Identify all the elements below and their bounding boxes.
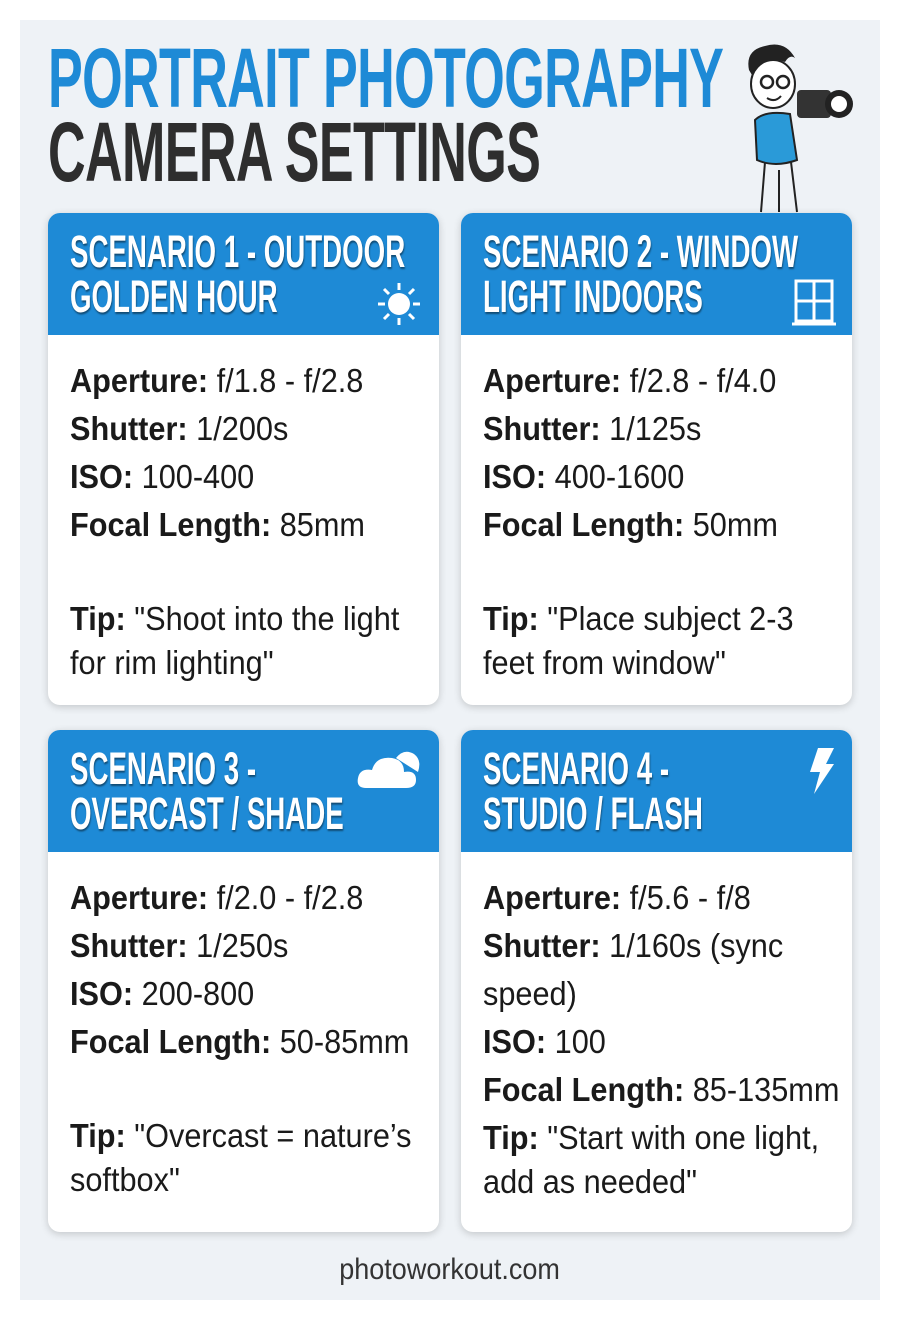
settings text: speed) (483, 975, 577, 1012)
title (48, 31, 723, 199)
header: scenario 4: SCENARIO 4 - (483, 743, 669, 794)
settings text: Aperture: f/1.8 - f/2.8 (70, 362, 363, 399)
settings text: ISO: 200-800 (70, 975, 254, 1012)
panel: scenario 1 (48, 213, 439, 705)
settings text: Focal Length: 50-85mm (70, 1023, 409, 1060)
settings text: feet from window" (483, 644, 726, 681)
panel: scenario 2 (461, 213, 852, 705)
settings text: Aperture: f/2.0 - f/2.8 (70, 879, 363, 916)
settings text: Shutter: 1/250s (70, 927, 288, 964)
icon: photographer mascot (748, 44, 853, 212)
title: PORTRAIT PHOTOGRAPHY (48, 31, 723, 125)
settings text: ISO: 400-1600 (483, 458, 684, 495)
header: scenario 2: SCENARIO 2 - WINDOW (483, 226, 798, 277)
icon: lightning (810, 748, 834, 794)
header: scenario 2: LIGHT INDOORS (483, 271, 703, 322)
settings text: for rim lighting" (70, 644, 274, 681)
settings text: Focal Length: 85mm (70, 506, 365, 543)
settings text (70, 362, 400, 681)
header: scenario 4 (461, 730, 852, 852)
settings text: ISO: 100 (483, 1023, 606, 1060)
settings text: Tip: "Place subject 2-3 (483, 600, 794, 637)
settings text: softbox" (70, 1161, 180, 1198)
settings text (70, 879, 412, 1198)
header: scenario 1: GOLDEN HOUR (70, 271, 278, 322)
settings text: Shutter: 1/125s (483, 410, 701, 447)
settings text: Tip: "Shoot into the light (70, 600, 399, 637)
settings text: Tip: "Start with one light, (483, 1119, 819, 1156)
settings text: Tip: "Overcast = nature’s (70, 1117, 412, 1154)
settings text: Focal Length: 85-135mm (483, 1071, 839, 1108)
settings text: Shutter: 1/200s (70, 410, 288, 447)
settings text: Shutter: 1/160s (sync (483, 927, 783, 964)
settings text (483, 879, 839, 1200)
icon: sun (378, 283, 420, 325)
settings text: Aperture: f/5.6 - f/8 (483, 879, 751, 916)
settings text (483, 362, 794, 681)
header: scenario 3: OVERCAST / SHADE (70, 788, 344, 839)
title: CAMERA SETTINGS (48, 105, 540, 199)
footer: photoworkout.com (340, 1253, 560, 1286)
header: scenario 3 (48, 730, 439, 852)
settings text: ISO: 100-400 (70, 458, 254, 495)
header: scenario 1 (48, 213, 439, 335)
header: scenario 1: SCENARIO 1 - OUTDOOR (70, 226, 405, 277)
panel: scenario 3 (48, 730, 439, 1232)
header: scenario 4: STUDIO / FLASH (483, 788, 703, 839)
icon: window (792, 280, 836, 326)
icon: cloud (358, 752, 420, 788)
settings text: Aperture: f/2.8 - f/4.0 (483, 362, 776, 399)
settings text: Focal Length: 50mm (483, 506, 778, 543)
settings text: add as needed" (483, 1163, 697, 1200)
header: scenario 2 (461, 213, 852, 335)
header: scenario 3: SCENARIO 3 - (70, 743, 256, 794)
panel: scenario 4 (461, 730, 852, 1232)
